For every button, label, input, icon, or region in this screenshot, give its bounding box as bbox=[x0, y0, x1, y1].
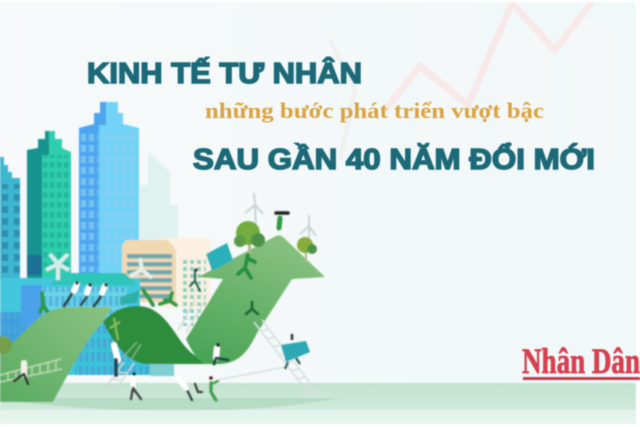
rope bbox=[218, 367, 285, 380]
title line 2: SAU GẦN 40 NĂM ĐỔI MỚI bbox=[193, 142, 595, 176]
growth arrow: first light-green swoosh bbox=[0, 307, 112, 402]
wind turbine: hill right bbox=[300, 215, 316, 245]
tower: left bbox=[0, 157, 20, 345]
subtitle: những bước phát triển vượt bậc bbox=[205, 98, 544, 123]
ladder: left on swoosh bbox=[0, 359, 62, 382]
ladder: right leaning bbox=[254, 320, 320, 398]
people: pulling team bbox=[64, 281, 108, 306]
people: green runners bbox=[40, 213, 288, 314]
faint background chart bbox=[330, 2, 615, 170]
ground band bbox=[0, 383, 640, 427]
title bbox=[87, 56, 595, 176]
wind turbine: hill left bbox=[245, 193, 263, 228]
ladder: centre ground bbox=[102, 300, 205, 394]
tree: large bbox=[234, 221, 265, 254]
tower: blue bbox=[79, 102, 139, 275]
growth arrow: upward head bbox=[186, 235, 325, 364]
faded background tower bbox=[140, 151, 178, 250]
wind turbine: left fan bbox=[46, 254, 69, 280]
people: workers on ground bbox=[14, 343, 228, 400]
billboard: teal bbox=[206, 243, 233, 271]
tree: left edge bbox=[0, 336, 12, 354]
billboard: roof bbox=[120, 290, 140, 305]
lower city block bbox=[0, 273, 174, 376]
wind turbine: centre fan bbox=[130, 258, 152, 278]
cream building bbox=[122, 238, 210, 326]
tower: teal bbox=[27, 131, 71, 280]
title line 1: KINH TẾ TƯ NHÂN bbox=[87, 56, 362, 90]
tree: small bbox=[297, 237, 317, 262]
sign carrier bbox=[281, 334, 310, 369]
tree: fold bbox=[110, 318, 120, 340]
growth arrow: dark fold bbox=[103, 306, 218, 364]
